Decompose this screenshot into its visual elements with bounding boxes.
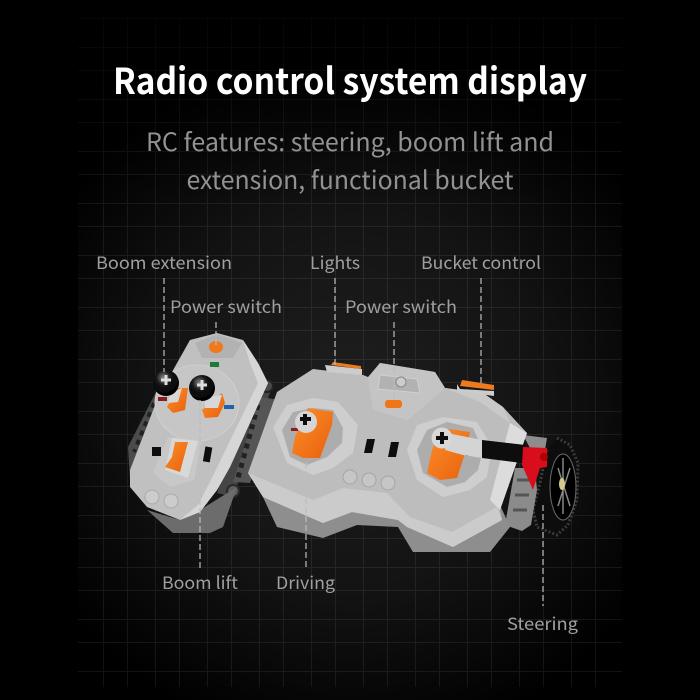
left remote beams xyxy=(128,380,280,497)
callout labels: Power switch xyxy=(170,293,282,318)
steering rack xyxy=(505,435,547,531)
right controller base xyxy=(255,480,510,552)
callout labels: Power switch xyxy=(345,293,457,318)
product illustration xyxy=(128,333,578,552)
subtitle: RC features: steering, boom lift and xyxy=(146,123,554,159)
callout labels: Bucket control xyxy=(421,249,541,274)
icon: steering wheel xyxy=(533,438,578,535)
subtitle xyxy=(146,123,554,197)
power switch button xyxy=(209,341,223,353)
right controller body xyxy=(248,362,527,547)
left stick octagon xyxy=(273,398,358,475)
callout labels: Steering xyxy=(507,610,578,635)
green led xyxy=(210,362,219,367)
center power panel xyxy=(368,363,445,420)
callout labels: Boom extension xyxy=(96,249,232,274)
callout leader lines xyxy=(164,278,543,606)
left joystick xyxy=(153,370,188,413)
middle slots and studs xyxy=(343,439,399,490)
bucket button xyxy=(457,380,494,396)
callout labels: Driving xyxy=(276,569,335,594)
steering axle and red lever xyxy=(482,440,548,490)
right stick octagon xyxy=(407,417,492,497)
left remote body xyxy=(130,333,268,520)
callout labels: Lights xyxy=(310,249,360,274)
callout labels xyxy=(96,249,578,635)
slots and studs xyxy=(145,446,212,508)
title: Radio control system display xyxy=(113,53,587,105)
callout labels: Boom lift xyxy=(162,569,239,594)
right joystick xyxy=(189,375,234,418)
slider xyxy=(165,442,188,472)
subtitle: extension, functional bucket xyxy=(186,161,514,197)
lights button xyxy=(325,362,362,375)
left remote base xyxy=(147,487,237,533)
